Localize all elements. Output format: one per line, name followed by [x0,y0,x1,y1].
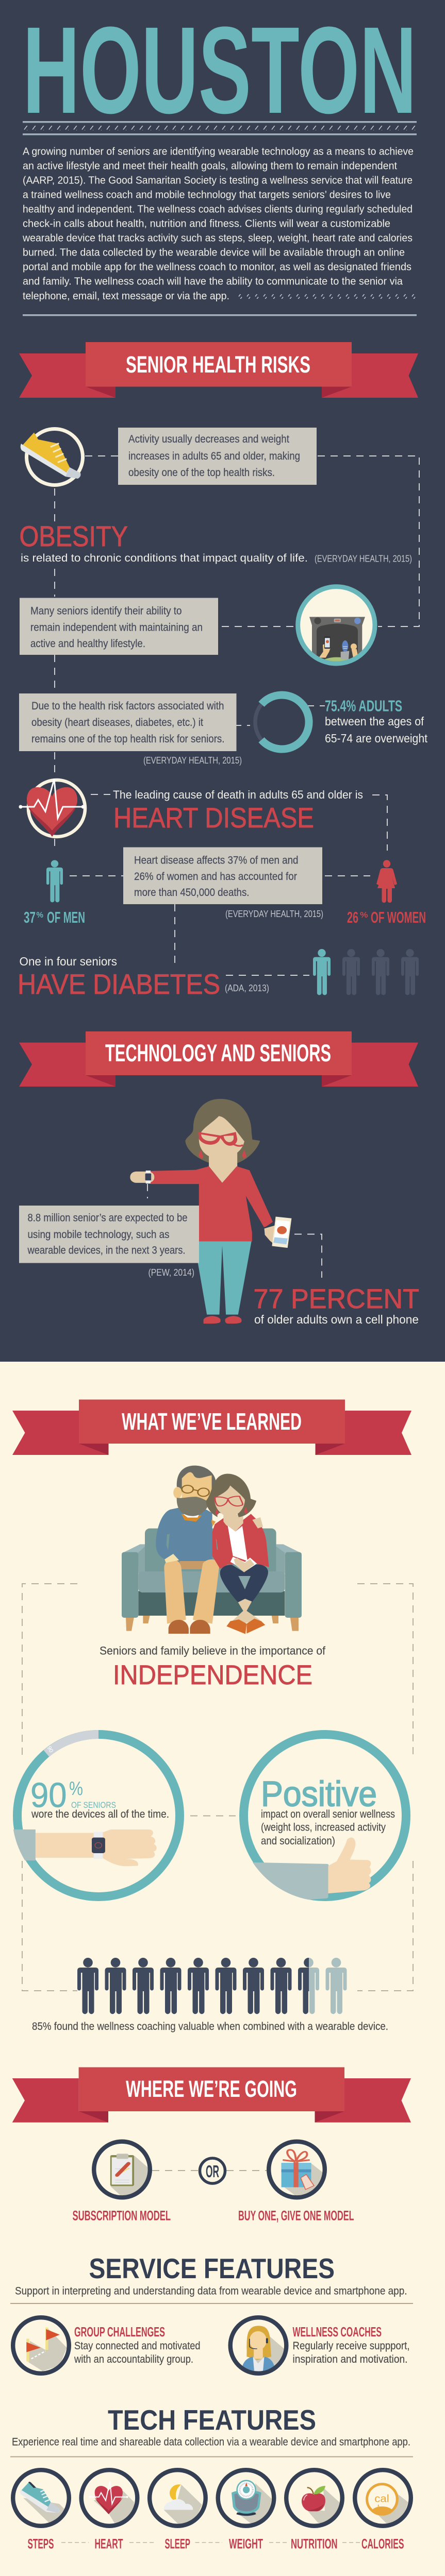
icon: yellow shoe [21,429,83,485]
stat: 37 percent of men: OF MEN [47,908,85,926]
panel: dark background [0,0,445,1362]
stat: 75.4 percent adults [325,697,428,745]
callout: mobile technology box: 8.8 million senior’s are expected to be [28,1212,188,1224]
intro paragraph: check-in calls about health, nutrition and fitness. Clients will wear a customizable [23,217,390,230]
heading: diabetes [18,955,269,1000]
stat: 75.4 percent adults: 65-74 are overweight [325,732,428,745]
labels: tech features: WEIGHT [229,2536,263,2551]
icon: wrist with watch [11,1829,157,1866]
text: group challenges: Stay connected and motivated [74,2340,200,2352]
heading: obesity: OBESITY [20,520,128,552]
stat: 37 percent of men: 37 [24,908,36,926]
text: independence: Seniors and family believe in the importance of [100,1645,326,1657]
intro paragraph: an active lifestyle and meet their health goals, allowing them to remain independent [23,160,397,172]
labels: tech features: HEART [95,2536,123,2551]
callout: risk factors box: obesity (heart diseases, diabetes, etc.) it [31,716,203,728]
labels: tech features [28,2536,404,2551]
ribbon: senior health risks: SENIOR HEALTH RISKS [126,351,310,378]
heading: tech features: TECH FEATURES [108,2404,316,2436]
stat: 90 percent: 90 [30,1775,67,1815]
callout: independence box: Many seniors identify their ability to [30,605,182,617]
icon: wellness coach [230,2317,286,2374]
icon: thumbs up [250,1838,371,1900]
callout: risk factors box: Due to the health risk factors associated with [31,700,224,712]
stat: 26 percent of women: 26 [347,908,358,926]
ribbon: senior health risks [19,342,418,398]
labels: tech features: STEPS [28,2536,54,2551]
intro paragraph: and family. The wellness coach will have the ability to communicate to the senior via [23,275,403,287]
labels: tech features: SLEEP [165,2536,190,2551]
heading: service features: SERVICE FEATURES [89,2252,335,2284]
heading: diabetes: One in four seniors [20,955,117,968]
callout: mobile technology box: wearable devices, in the next 3 years. [27,1244,185,1256]
closing hatch and rule [23,294,417,316]
connector dashes: tech labels [61,2542,361,2543]
icon: or badge: OR [206,2162,219,2181]
text: wellness impact: and socialization) [261,1835,335,1847]
panel: 90 percent ring [11,1734,179,1897]
heading: obesity: (EVERYDAY HEALTH, 2015) [315,553,412,564]
icon: sleep [150,2470,206,2526]
icon: subscription clipboard [94,2142,150,2197]
illustration: couple on couch [122,1466,302,1634]
connector between rings [190,1816,236,1817]
callout: heart disease box: 26% of women and has accounted for [134,870,297,883]
labels: tech features: CALORIES [361,2536,404,2551]
icon: apple [286,2470,342,2526]
text: independence [100,1645,326,1690]
illustration: woman with watch and phone [130,1099,291,1324]
panel: header [22,1,417,316]
labels: tech features: NUTRITION [291,2536,337,2551]
intro paragraph: burned. The data collected by the wearable device will be available through an online [23,246,405,259]
title rules and hatching [23,121,417,135]
callout: activity box: obesity one of the top health risks. [128,466,275,479]
heading: heart disease: HEART DISEASE [113,802,314,834]
stat: 90 percent: OF SENIORS [71,1801,116,1810]
stat: 37 percent of men: % [36,911,43,920]
intro paragraph: portal and mobile app for the wellness coach to monitor, as well as designated friends [23,261,411,273]
callout: independence box: active and healthy lifestyle. [30,637,145,650]
connector dashes: technology [147,1184,322,1278]
ribbon: technology and seniors: TECHNOLOGY AND SENIORS [105,1039,331,1066]
source note: (EVERYDAY HEALTH, 2015) [143,755,242,766]
icon: heart [81,2470,137,2526]
couch and lower bodies [122,1507,302,1634]
stat: 37 percent of men [24,908,85,926]
icon: woman [376,860,397,903]
callout: risk factors box [19,693,236,751]
icon: steps [13,2470,69,2526]
callout: heart disease box: more than 450,000 deaths. [134,886,250,899]
ribbon: where we're going: WHERE WE’RE GOING [126,2076,297,2102]
intro paragraph: telephone, email, text message or via the app. [23,290,229,302]
icon: group challenge flags [13,2317,69,2374]
callout: activity box [118,428,317,485]
text: group challenges [74,2324,200,2365]
text: independence: INDEPENDENCE [113,1660,312,1690]
callout: heart disease box: Heart disease affects 37% of men and [134,854,298,867]
callout: independence box [20,598,218,655]
icon: man [46,860,63,902]
text: wellness impact: (weight loss, increased activity [261,1821,386,1833]
panel: cream background [0,1362,445,2576]
icon: weight scale [218,2470,274,2526]
stat: 26 percent of women [347,908,426,926]
callout: mobile technology box [19,1206,199,1263]
stat: 75.4 percent adults: 75.4% ADULTS [325,697,402,715]
connector dashes: health risks [55,456,419,975]
pictogram: one in four seniors [313,949,419,995]
text: devices: wore the devices all of the time. [31,1808,169,1820]
text: 85 percent: 85% found the wellness coaching valuable when combined with a wearable device. [32,2020,388,2032]
label: subscription model: SUBSCRIPTION MODEL [72,2208,171,2224]
text: wellness coaches: Regularly receive suppport, [293,2340,409,2352]
stat: 75.4 percent adults: between the ages of [325,715,424,728]
callout: activity box: Activity usually decreases and weight [128,433,289,445]
intro paragraph: a trained wellness coach and mobile technology that targets seniors’ desires to live [23,189,391,201]
intro paragraph [22,145,414,302]
intro paragraph: healthy and independent. The wellness coach advises clients during regularly scheduled [23,203,413,215]
source note: (EVERYDAY HEALTH, 2015) [225,909,323,919]
source note: (PEW, 2014) [149,1267,194,1278]
heading: heart disease: The leading cause of death in adults 65 and older is [113,788,363,801]
text: wellness coaches: WELLNESS COACHES [293,2324,382,2340]
label: buy one give one: BUY ONE, GIVE ONE MODEL [238,2208,354,2224]
heading: heart disease [113,788,363,834]
ribbon: technology and seniors [19,1031,418,1087]
heading: service features [10,2252,413,2304]
icon: treadmill [298,587,375,668]
callout: risk factors box: remains one of the top health risk for seniors. [31,733,225,745]
heading: diabetes: (ADA, 2013) [225,983,269,993]
dashed frame [22,1584,413,1991]
stat: 77 percent: of older adults own a cell phone [254,1313,419,1326]
icon: calories gauge: cal [374,2493,389,2505]
stat: positive: Positive [261,1774,377,1814]
text: group challenges: with an accountability group. [74,2353,193,2365]
icon: or badge [200,2158,225,2183]
chart: 75.4 percent ring [255,695,309,749]
text: wellness impact [261,1808,395,1847]
callout: heart disease box [123,847,322,904]
heading: obesity: is related to chronic conditions that impact quality of life. [21,552,308,564]
small ring label: 90 [46,1745,54,1754]
text: wellness coaches: inspiration and motivation. [293,2353,407,2365]
stat: 90 percent: % [69,1778,83,1800]
heading: tech features [10,2404,413,2458]
ribbon: what we've learned [12,1399,411,1455]
intro paragraph: A growing number of seniors are identifying wearable technology as a means to achieve [23,145,414,158]
heading: obesity [20,520,412,564]
text: wellness impact: impact on overall senior wellness [261,1808,395,1820]
callout: mobile technology box: using mobile technology, such as [28,1228,169,1241]
intro paragraph: wearable device that tracks activity such as steps, sleep, weight, heart rate and calories [22,232,413,244]
pictogram: 85 percent [77,1958,347,2014]
ribbon: where we're going [12,2067,411,2123]
heading: diabetes: HAVE DIABETES [18,968,220,1000]
stat: 77 percent: 77 PERCENT [254,1284,419,1314]
intro paragraph: (AARP, 2015). The Good Samaritan Society is testing a wellness service that will feature [23,174,413,187]
icon: heart with pulse [19,779,85,837]
icon: gift box [269,2142,325,2197]
ribbon: what we've learned: WHAT WE’VE LEARNED [122,1408,302,1435]
stat: 90 percent [30,1775,116,1815]
heads [173,1466,256,1521]
panel: positive ring [243,1734,406,1900]
stat: 26 percent of women: % [360,911,368,920]
callout: independence box: remain independent with maintaining an [30,621,203,634]
callout: activity box: increases in adults 65 and older, making [128,450,300,462]
icon: calories gauge [355,2470,411,2526]
text: group challenges: GROUP CHALLENGES [74,2324,165,2340]
connector: business models [152,2170,267,2171]
text: wellness coaches [293,2324,409,2365]
